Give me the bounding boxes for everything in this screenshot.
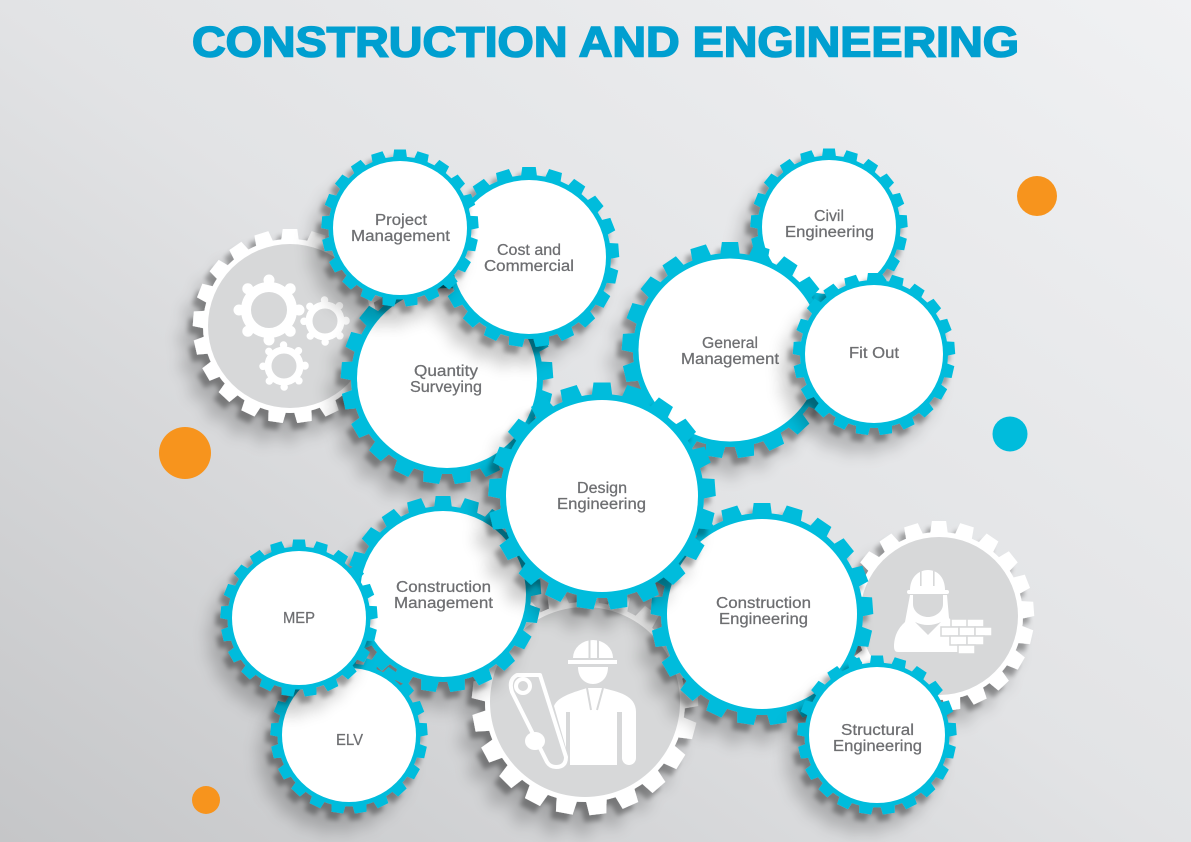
- label: [833, 722, 922, 755]
- label: [557, 480, 646, 513]
- label: [681, 335, 780, 368]
- label: MEP: [283, 610, 315, 627]
- label: [351, 212, 451, 245]
- label: Design: [577, 480, 627, 497]
- label: Engineering: [785, 224, 874, 241]
- label: Management: [681, 351, 780, 368]
- label: [785, 208, 874, 241]
- label: Engineering: [719, 611, 808, 628]
- label: Management: [394, 595, 494, 612]
- decorative dot: large orange: [159, 427, 211, 479]
- gear: ELV: [270, 656, 428, 814]
- label: Commercial: [484, 258, 574, 275]
- gear: Design Engineering: [488, 382, 716, 610]
- label: Management: [351, 228, 451, 245]
- gear: Civil Engineering: [750, 148, 908, 306]
- decorative dot: top right orange: [1017, 176, 1057, 216]
- icon: engineer holding blueprint roll: [511, 640, 636, 767]
- icon: three cogs: [239, 280, 346, 387]
- label: Structural: [841, 722, 914, 739]
- label: [410, 363, 482, 396]
- label: Construction: [396, 579, 491, 596]
- label: [394, 579, 494, 612]
- gear: MEP: [220, 540, 378, 697]
- label: [716, 595, 811, 628]
- gear: Cost and Commercial: [439, 167, 619, 347]
- grey gear with bricklayer icon: [844, 521, 1034, 711]
- title: CONSTRUCTION AND ENGINEERING: [192, 20, 1019, 66]
- label: Engineering: [557, 496, 646, 513]
- label: Fit Out: [849, 345, 900, 362]
- grey gear with engineer icon: [468, 585, 702, 819]
- decorative dot: small orange: [192, 786, 220, 814]
- gear: Structural Engineering: [797, 656, 957, 815]
- label: Quantity: [414, 363, 478, 380]
- label: Surveying: [410, 379, 482, 396]
- gear: General Management: [622, 242, 838, 458]
- gear: Construction Engineering: [651, 503, 873, 725]
- icon: female worker with bricks: [894, 570, 992, 654]
- label: Project: [375, 212, 428, 229]
- gear: Quantity Surveying: [341, 272, 553, 484]
- decorative dot: teal: [992, 416, 1028, 452]
- label: ELV: [336, 732, 364, 749]
- grey gear with cogs icon: [193, 229, 387, 423]
- label: Engineering: [833, 738, 922, 755]
- label: Cost and: [497, 242, 561, 259]
- label: Construction: [716, 595, 811, 612]
- label: General: [702, 335, 758, 352]
- gear: Project Management: [321, 150, 479, 307]
- gear: Fit Out: [793, 273, 955, 435]
- gear: Construction Management: [345, 496, 541, 692]
- label: [484, 242, 574, 275]
- label: Civil: [814, 208, 844, 225]
